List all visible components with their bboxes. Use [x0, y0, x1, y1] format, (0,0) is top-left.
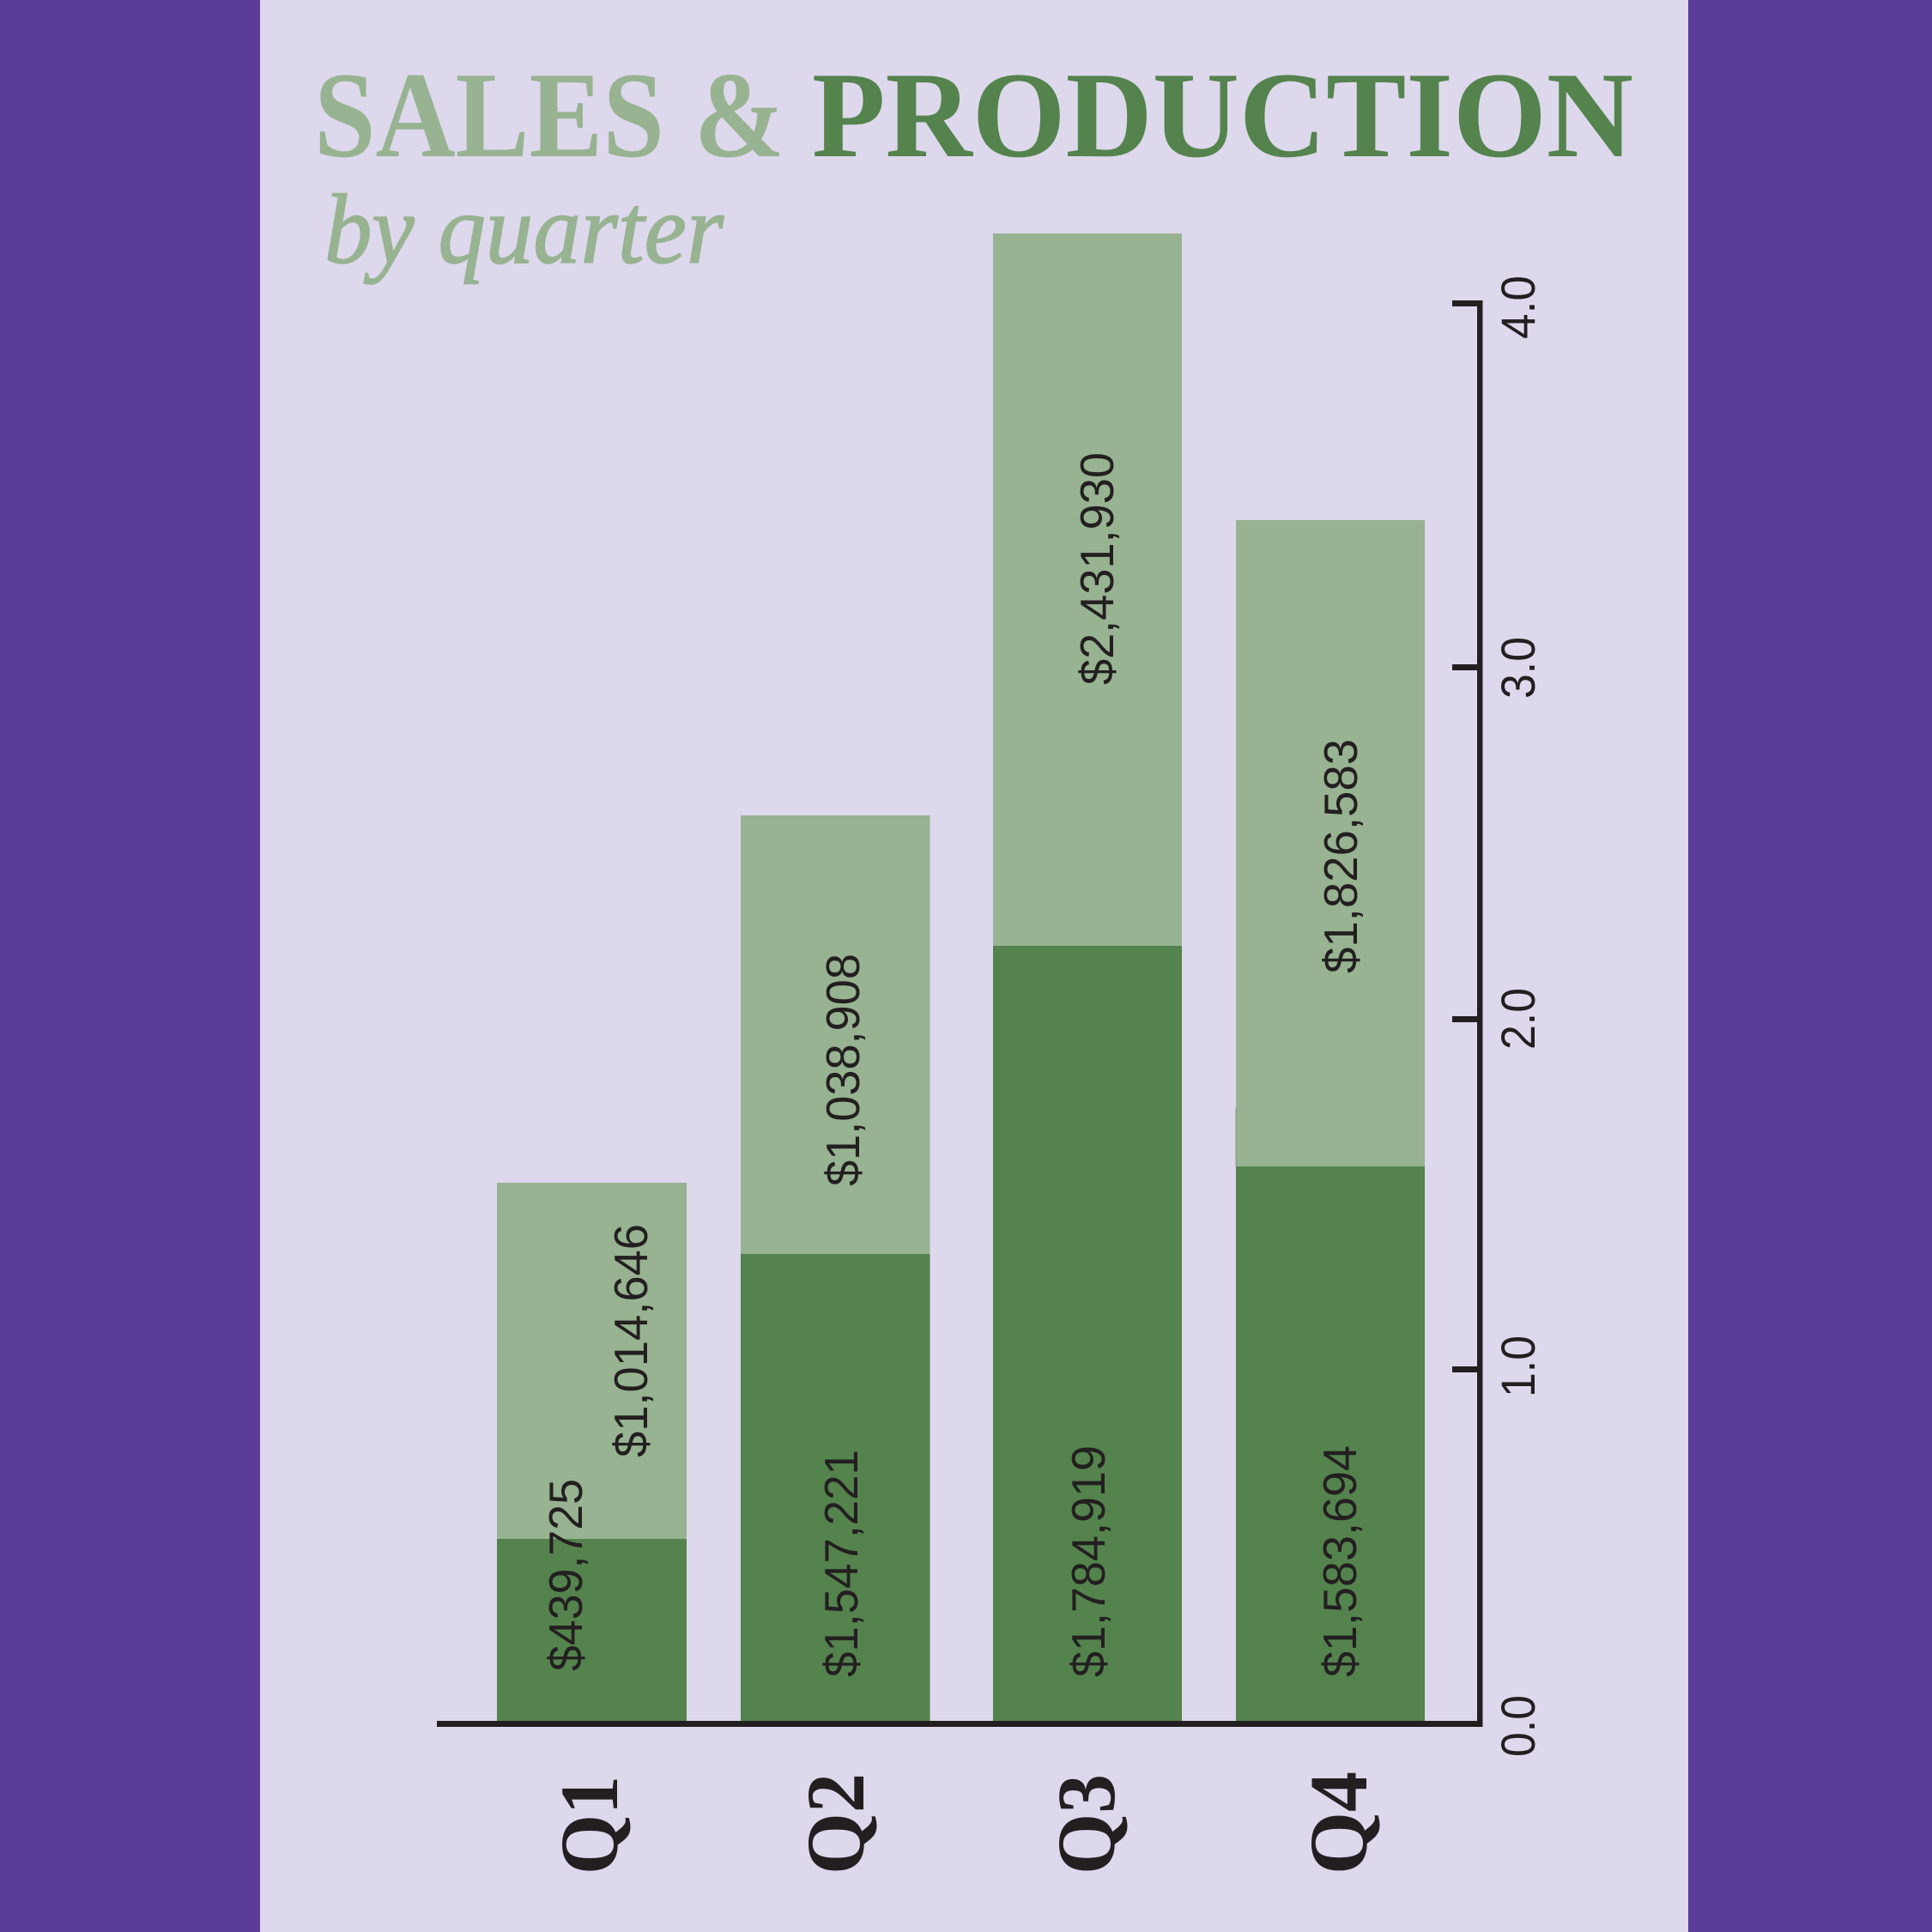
title: sales: SALES — [314, 47, 664, 183]
y axis line — [1477, 300, 1483, 1727]
title: ampersand: & — [694, 47, 784, 183]
bar: Q1 — [497, 1183, 687, 1723]
value: Q3 production: $1,784,919 — [1062, 1445, 1115, 1677]
tick label 2.0: 2.0 — [1491, 988, 1545, 1050]
value: Q2 sales: $1,038,908 — [816, 954, 869, 1186]
bar: Q4 — [1236, 520, 1425, 1723]
axes — [437, 300, 1483, 1727]
bar: Q2 — [741, 815, 930, 1723]
value: Q4 sales: $1,826,583 — [1314, 739, 1367, 973]
title: production: PRODUCTION — [812, 47, 1633, 183]
value: Q1 sales: $1,014,646 — [604, 1224, 657, 1457]
value labels — [539, 452, 1367, 1677]
central panel — [260, 0, 1688, 1932]
tick label 1.0: 1.0 — [1491, 1335, 1545, 1397]
tick label 0.0: 0.0 — [1491, 1695, 1545, 1757]
quarter label Q2: Q2 — [790, 1773, 881, 1874]
value: Q4 production: $1,583,694 — [1313, 1445, 1366, 1677]
tick label 3.0: 3.0 — [1491, 637, 1545, 699]
quarter label Q4: Q4 — [1293, 1772, 1384, 1874]
quarter label Q3: Q3 — [1040, 1774, 1132, 1874]
bar chart — [497, 233, 1425, 1723]
tick label 4.0: 4.0 — [1491, 276, 1545, 339]
y axis labels — [1491, 276, 1545, 1757]
title — [314, 47, 1633, 183]
x axis line — [437, 1721, 1482, 1727]
quarter label Q1: Q1 — [543, 1776, 635, 1874]
value: Q2 production: $1,547,221 — [815, 1450, 868, 1677]
value: Q3 sales: $2,431,930 — [1070, 452, 1123, 685]
bar: Q3 — [993, 233, 1182, 1723]
subtitle: by quarter — [324, 175, 724, 285]
value: Q1 production: $439,725 — [539, 1479, 592, 1671]
x axis labels — [543, 1772, 1384, 1874]
y axis ticks — [1452, 300, 1480, 1372]
